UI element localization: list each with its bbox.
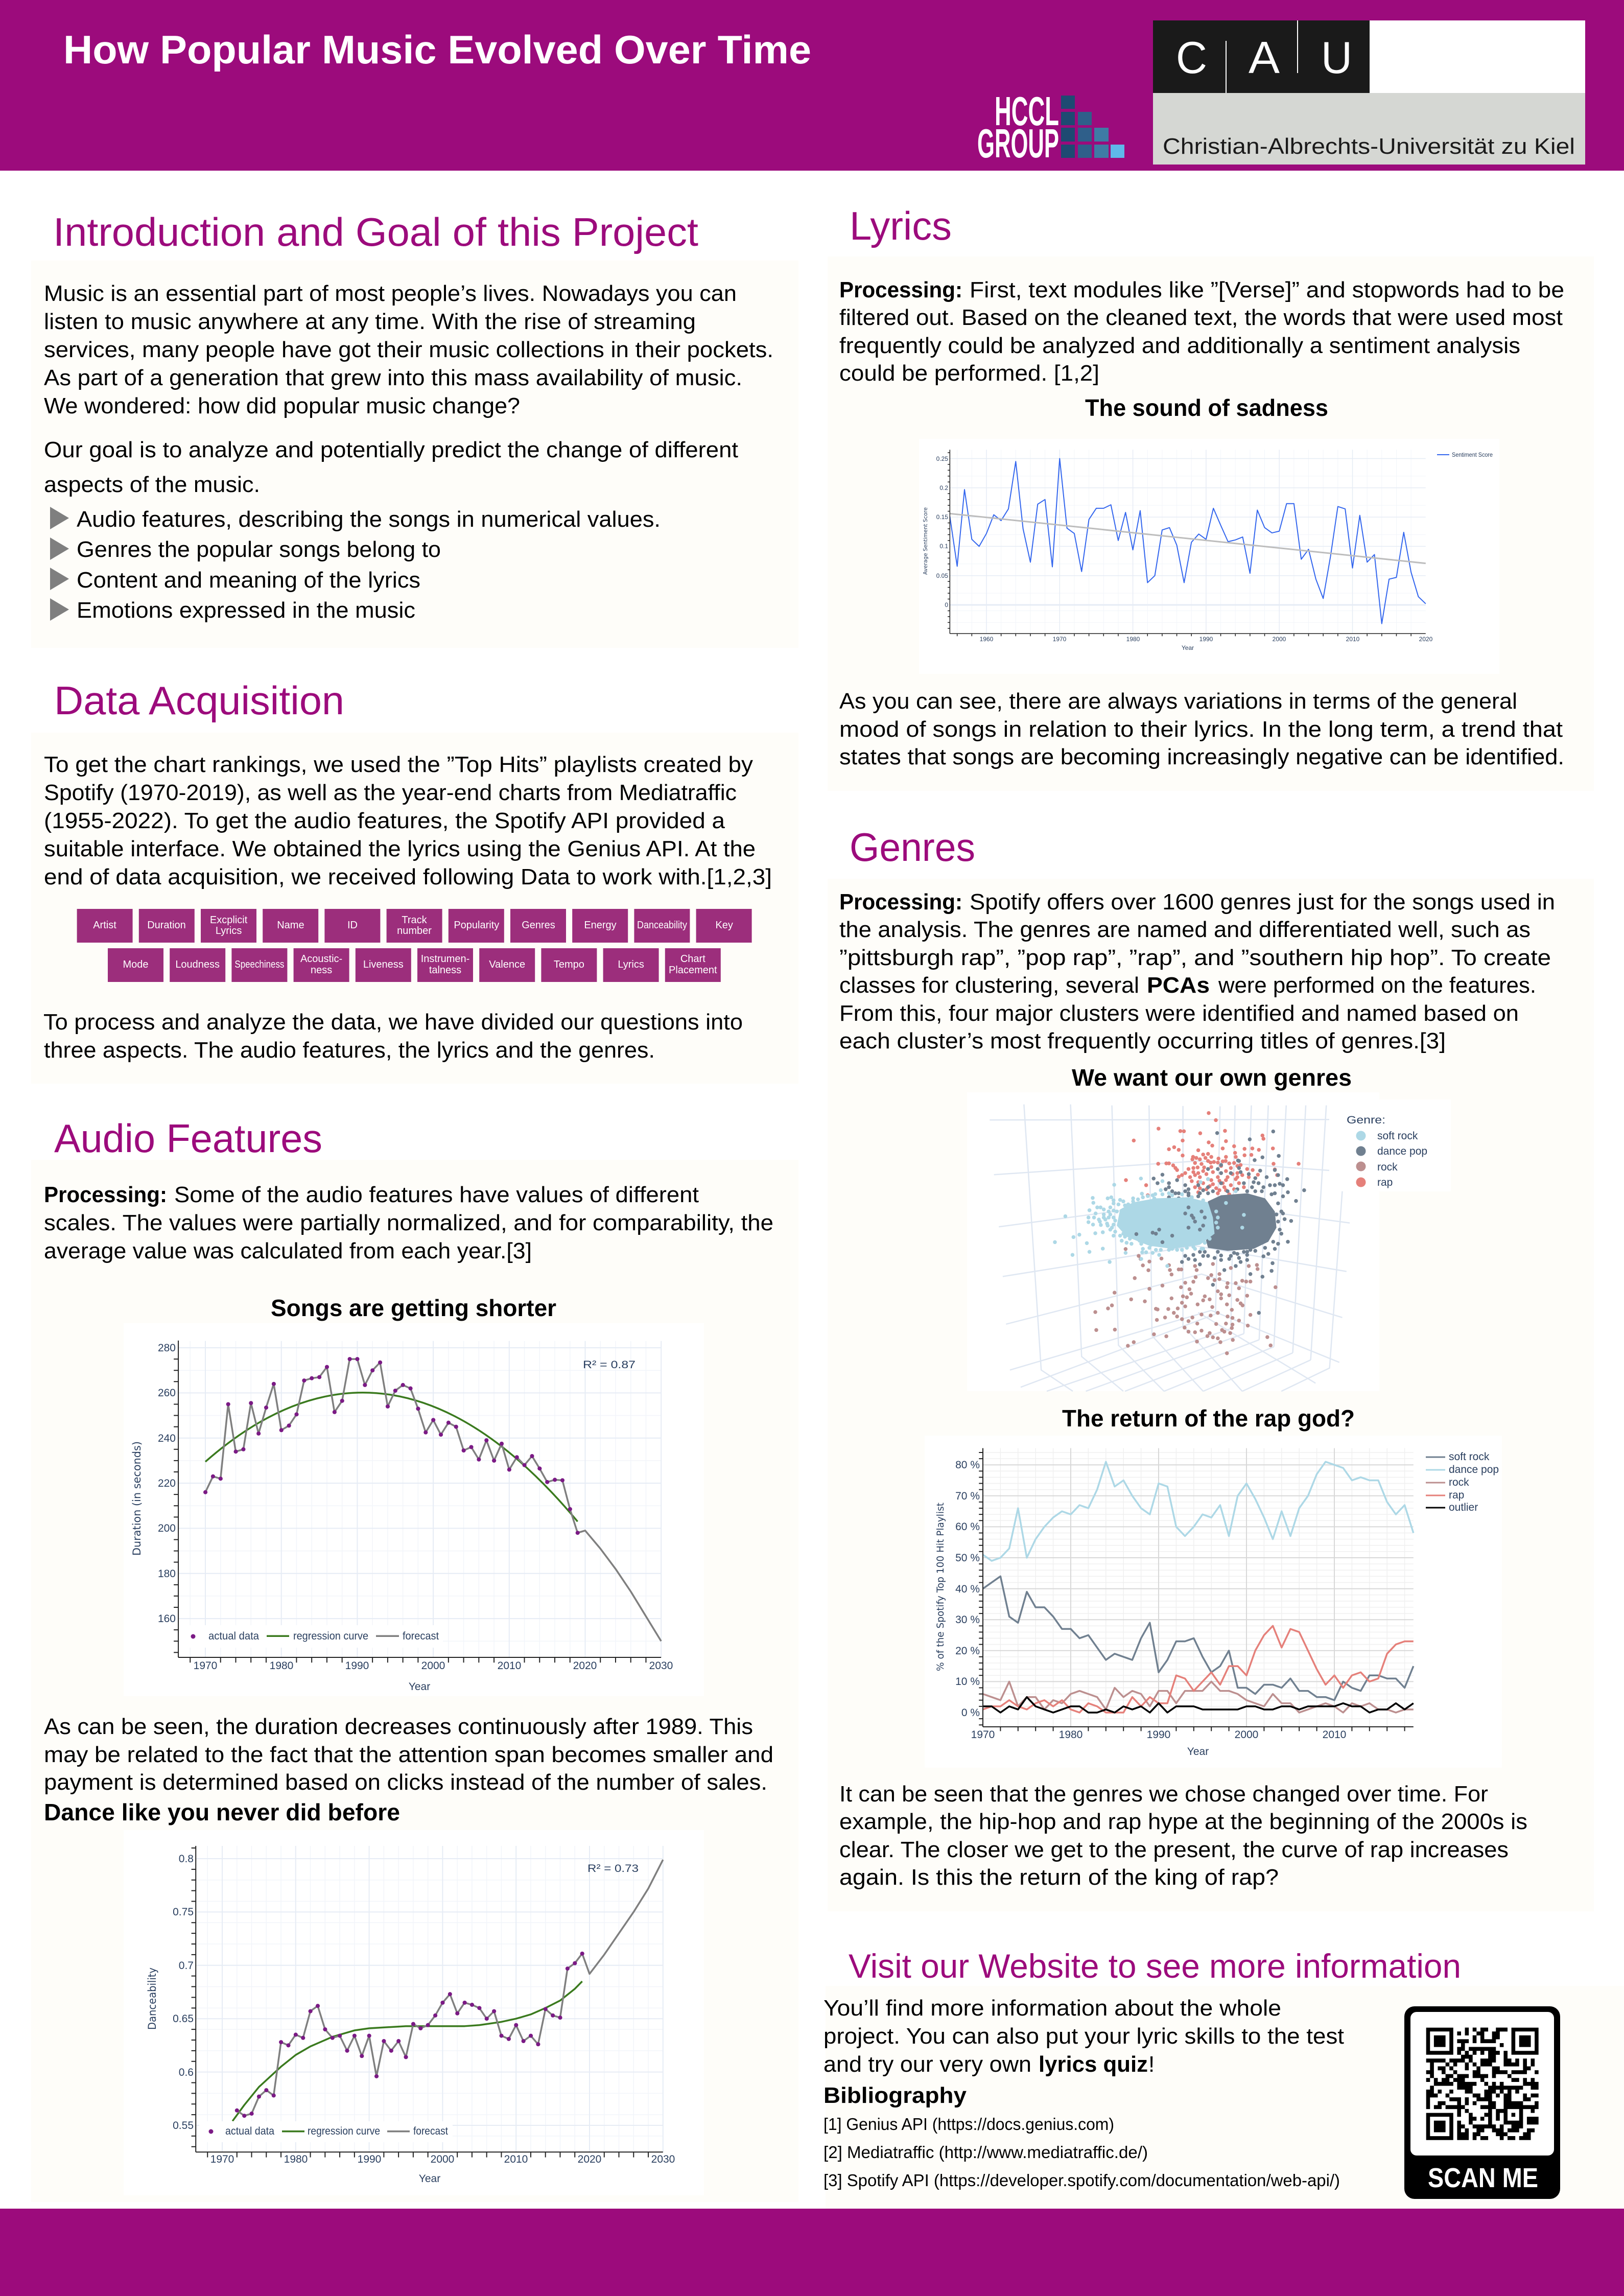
line chart: genre shares: % of the Spotify Top 100 Hit Playlist [935, 1503, 946, 1671]
line chart: danceability: R² = 0.73 [587, 1863, 639, 1875]
text block: website [823, 1996, 1344, 2077]
data attribute chips: Tempo [554, 959, 584, 970]
heading: introduction: Introduction and Goal of this Project [53, 209, 698, 254]
text block: duration explanation: As can be seen, the duration decreases continuously after 1989. This [44, 1714, 753, 1739]
data attribute chips: Danceability [637, 920, 687, 931]
line chart: duration: R² = 0.87 [583, 1359, 636, 1371]
panel: audio features [31, 1116, 798, 2202]
legend: genre lines: rock [1449, 1477, 1469, 1488]
data attribute chips: number [397, 925, 432, 936]
text block: lyrics processing: could be performed. [1,2] [839, 361, 1099, 386]
line chart: genre shares [925, 1436, 1502, 1768]
legend: genre: soft rock [1377, 1130, 1418, 1142]
data attribute chips: Popularity [454, 920, 499, 931]
line chart: sentiment: 0.15 [936, 513, 948, 521]
bullet list [50, 507, 661, 623]
panel: genres [828, 825, 1594, 1911]
bibliography: [1] Genius API (https://docs.genius.com) [823, 2115, 1114, 2134]
line chart: sentiment: Year [1182, 644, 1194, 651]
data attribute chips: Excplicit [210, 915, 248, 926]
legend: genre lines [1426, 1451, 1499, 1513]
line chart: sentiment: 0.05 [936, 572, 948, 579]
line chart: genre shares: 70 % [955, 1490, 980, 1502]
data attribute chips: Placement [669, 965, 717, 976]
heading: lyrics: Lyrics [850, 203, 952, 248]
QR code: SCAN ME [1428, 2163, 1538, 2193]
line chart: duration: forecast [403, 1630, 439, 1642]
data attribute chips: talness [429, 965, 461, 976]
line chart: duration: 1980 [270, 1660, 293, 1672]
heading: audio features: Audio Features [54, 1116, 322, 1161]
heading: genres: Genres [850, 825, 975, 870]
line chart: duration: 1990 [345, 1660, 369, 1672]
legend: genre lines: rap [1449, 1489, 1464, 1501]
legend: genre lines: outlier [1449, 1502, 1478, 1513]
CAU university logo: U [1321, 32, 1352, 83]
text block: lyrics explanation [839, 689, 1564, 769]
line chart: genre shares: 2000 [1235, 1729, 1258, 1741]
line chart: danceability: Year [419, 2173, 440, 2185]
line chart: danceability: 0.7 [179, 1960, 194, 1972]
text block: introduction: listen to music anywhere at any time. With the rise of streaming [44, 309, 696, 334]
CAU university logo: Christian-Albrechts-Universität zu Kiel [1163, 134, 1575, 159]
line chart: genre shares: 30 % [955, 1614, 980, 1626]
line chart: genre shares: 60 % [955, 1521, 980, 1533]
line chart: duration: 240 [158, 1433, 176, 1444]
heading: data acquisition: Data Acquisition [54, 678, 344, 723]
line chart: danceability: Danceability [146, 1967, 158, 2030]
line chart: danceability: 1990 [358, 2153, 381, 2165]
line chart: duration: Year [409, 1681, 430, 1693]
panel: lyrics [828, 203, 1594, 791]
text block: audio processing: scales. The values were partially normalized, and for comparability, the [44, 1210, 773, 1235]
text block: genres processing: PCAs [1147, 973, 1210, 998]
text block: data acquisition: (1955-2022). To get the audio features, the Spotify API provided a [44, 808, 725, 833]
line chart: sentiment: 2000 [1273, 636, 1286, 643]
text block: introduction: We wondered: how did popular music change? [44, 393, 520, 418]
line chart: genre shares: 10 % [955, 1676, 980, 1688]
data attribute chips: Track [402, 915, 428, 926]
data attribute chips: Lyrics [618, 959, 644, 970]
bibliography [823, 2083, 1340, 2190]
text block: data acquisition: end of data acquisition, we received following Data to work with.[1,2,3] [44, 864, 772, 889]
text block: lyrics processing: First, text modules like ”[Verse]” and stopwords had to be [970, 277, 1564, 302]
line chart: genre shares: 1980 [1059, 1729, 1082, 1741]
line chart: genre shares: 20 % [955, 1645, 980, 1657]
text block: lyrics explanation: mood of songs in relation to their lyrics. In the long term, a trend that [839, 717, 1563, 742]
legend: genre [1347, 1114, 1427, 1188]
line chart: duration: actual data [208, 1630, 259, 1642]
line chart: sentiment: 1970 [1053, 636, 1067, 643]
line chart: sentiment: 0.2 [939, 484, 948, 491]
text block: data acquisition: Spotify (1970-2019), as well as the year-end charts from Mediatraffic [44, 780, 737, 805]
chart title: dance: Dance like you never did before [44, 1799, 400, 1825]
line chart: genre shares: 2010 [1323, 1729, 1346, 1741]
text block: genres processing: ”pittsburgh rap”, ”pop rap”, ”rap”, and ”southern hip hop”. To create [839, 945, 1551, 970]
data attribute chips: ID [347, 920, 358, 931]
text block: audio processing: Some of the audio features have values of different [174, 1182, 699, 1207]
line chart: danceability: 0.55 [173, 2120, 194, 2131]
text block: introduction: Our goal is to analyze and potentially predict the change of different [44, 437, 738, 462]
text block: introduction [44, 281, 773, 497]
text block: data acquisition: suitable interface. We obtained the lyrics using the Genius API. At the [44, 836, 756, 861]
line chart: genre shares: 0 % [961, 1707, 980, 1719]
chart title: own genres: We want our own genres [1072, 1064, 1352, 1091]
text block: genres explanation: example, the hip-hop and rap hype at the beginning of the 2000s is [839, 1809, 1527, 1834]
data attribute chips: Duration [147, 920, 186, 931]
rock points [1095, 1249, 1276, 1353]
panel: introduction [31, 209, 798, 648]
data attribute chips: Genres [522, 920, 555, 931]
text block: lyrics processing [839, 277, 1564, 386]
line chart: genre shares: 40 % [955, 1583, 980, 1595]
line chart: sentiment: 1980 [1126, 636, 1140, 643]
line chart: sentiment: Average Sentiment Score [922, 507, 929, 575]
text block: genres processing [839, 889, 1555, 1053]
text block: audio processing [44, 1182, 773, 1263]
data attribute chips: Speechiness [234, 959, 284, 970]
text block: website: lyrics quiz [1039, 2052, 1148, 2077]
line chart: danceability: regression curve [308, 2125, 380, 2137]
line chart: duration: Duration (in seconds) [131, 1441, 143, 1556]
line chart: genre shares: Year [1187, 1746, 1209, 1758]
title: How Popular Music Evolved Over Time [63, 27, 811, 72]
chart title: sadness: The sound of sadness [1085, 394, 1328, 421]
bullet list: Audio features, describing the songs in numerical values. [77, 507, 661, 532]
data attribute chips: Chart [680, 953, 705, 965]
line chart: duration: 2010 [498, 1660, 521, 1672]
CAU university logo: A [1249, 32, 1280, 83]
line chart: genre shares: 80 % [955, 1459, 980, 1471]
chart title: songs: Songs are getting shorter [271, 1295, 556, 1321]
line chart: duration: 2020 [573, 1660, 597, 1672]
scatter chart: genre clusters [967, 1092, 1451, 1391]
line chart: sentiment: Sentiment Score [1452, 451, 1493, 458]
bibliography: [2] Mediatraffic (http://www.mediatraffic.de/) [823, 2143, 1148, 2162]
text block: genres processing: Spotify offers over 1600 genres just for the songs used in [970, 889, 1555, 915]
line chart: duration: 260 [158, 1387, 176, 1399]
CAU university logo: C [1176, 32, 1207, 83]
line chart: danceability: 1970 [210, 2153, 234, 2165]
text block: audio processing: average value was calculated from each year.[3] [44, 1238, 532, 1263]
line chart: danceability: 0.65 [173, 2013, 194, 2025]
line chart: duration: 280 [158, 1342, 176, 1354]
line chart: danceability: 1980 [284, 2153, 308, 2165]
dance pop points over soft rock [1136, 1207, 1205, 1242]
text block: genres processing: each cluster’s most frequently occurring titles of genres.[3] [839, 1028, 1446, 1053]
data attribute chips: Name [277, 920, 304, 931]
text block: genres processing: classes for clustering, several [839, 973, 1139, 998]
panel: data acquisition [31, 678, 798, 1084]
data attribute chips: Key [715, 920, 733, 931]
rap points [1126, 1113, 1299, 1199]
legend: genre: rock [1377, 1161, 1398, 1173]
line chart: sentiment: 1960 [980, 636, 994, 643]
bibliography: [3] Spotify API (https://developer.spotify.com/documentation/web-api/) [823, 2171, 1340, 2190]
text block: data acquisition: To get the chart rankings, we used the ”Top Hits” playlists created by [44, 752, 753, 777]
line chart: sentiment: 0.25 [936, 455, 948, 462]
line chart: genre shares: 1970 [971, 1729, 995, 1741]
text block: lyrics explanation: As you can see, there are always variations in terms of the general [839, 689, 1517, 714]
footer banner [0, 2209, 1624, 2296]
chart title: rap god: The return of the rap god? [1062, 1405, 1355, 1432]
HCCL group logo: GROUP [977, 121, 1059, 166]
line chart: sentiment: 0.1 [939, 543, 948, 550]
legend: genre lines: soft rock [1449, 1451, 1490, 1463]
QR code [1404, 2006, 1560, 2199]
header banner [0, 0, 1624, 171]
line chart: danceability: forecast [413, 2125, 448, 2137]
line chart: danceability: 2000 [431, 2153, 454, 2165]
text block: duration explanation: payment is determined based on clicks instead of the number of sales. [44, 1770, 767, 1795]
bullet list: Emotions expressed in the music [77, 598, 415, 623]
text block: duration explanation [44, 1714, 773, 1795]
data attribute chips: Mode [123, 959, 149, 970]
text block: genres explanation [839, 1782, 1527, 1890]
text block: lyrics explanation: states that songs are becoming increasingly negative can be identified. [839, 744, 1564, 769]
line chart: danceability: 2010 [504, 2153, 528, 2165]
data attribute chips: Artist [93, 920, 116, 931]
text block: website: project. You can also put your lyric skills to the test [823, 2024, 1344, 2049]
soft rock points [1055, 1179, 1244, 1266]
text block: data aspects [43, 1010, 743, 1063]
text block: website: ! [1148, 2052, 1155, 2077]
text block: genres explanation: again. Is this the return of the king of rap? [839, 1865, 1279, 1890]
panel: website [823, 1947, 1624, 2209]
legend: genre: dance pop [1377, 1145, 1427, 1157]
HCCL group logo: HCCL [995, 88, 1059, 134]
line chart: duration: 180 [158, 1568, 176, 1580]
line chart: duration: 220 [158, 1478, 176, 1489]
heading: website: Visit our Website to see more information [849, 1947, 1461, 1985]
bibliography: Bibliography [823, 2083, 967, 2108]
legend: genre: rap [1377, 1177, 1393, 1188]
bullet list: Content and meaning of the lyrics [77, 568, 420, 593]
text block: introduction: As part of a generation that grew into this mass availability of music. [44, 365, 742, 390]
line chart: danceability: 2020 [578, 2153, 601, 2165]
line chart: duration: 160 [158, 1613, 176, 1625]
line chart: duration [124, 1323, 704, 1696]
line chart: sentiment: 2010 [1346, 636, 1360, 643]
line chart: danceability: 0.8 [179, 1853, 194, 1865]
line chart: sentiment: 2020 [1419, 636, 1433, 643]
data attribute chips: Liveness [363, 959, 404, 970]
text block: website: You’ll find more information about the whole [823, 1996, 1281, 2021]
line chart: sentiment: 0 [945, 601, 948, 608]
text block: lyrics processing: filtered out. Based on the cleaned text, the words that were used most [839, 305, 1563, 330]
text block: website: and try our very own [823, 2052, 1031, 2077]
line chart: duration: 1970 [194, 1660, 217, 1672]
text block: lyrics processing: Processing: [839, 277, 962, 302]
line chart: danceability: 0.6 [179, 2067, 194, 2078]
data attribute chips [77, 909, 752, 982]
text block: introduction: Music is an essential part of most people’s lives. Nowadays you can [44, 281, 737, 306]
text block: data acquisition [44, 752, 772, 889]
legend: genre lines: dance pop [1449, 1464, 1499, 1475]
line chart: sentiment [919, 439, 1499, 674]
text block: lyrics processing: frequently could be analyzed and additionally a sentiment analysis [839, 333, 1520, 358]
text block: genres processing: Processing: [839, 889, 962, 915]
text block: data aspects: three aspects. The audio features, the lyrics and the genres. [44, 1038, 655, 1063]
line chart: danceability: 0.75 [173, 1906, 194, 1918]
text block: genres processing: From this, four major clusters were identified and named based on [839, 1001, 1519, 1026]
line chart: duration: regression curve [293, 1630, 368, 1642]
line chart: danceability: 2030 [651, 2153, 675, 2165]
legend: genre: Genre: [1347, 1114, 1385, 1126]
line chart: danceability [124, 1830, 704, 2195]
data attribute chips: Acoustic- [300, 953, 342, 965]
line chart: duration: 200 [158, 1522, 176, 1534]
data attribute chips: Energy [584, 920, 617, 931]
bullet list: Genres the popular songs belong to [77, 537, 441, 562]
data attribute chips: Valence [489, 959, 525, 970]
line chart: duration: 2030 [649, 1660, 673, 1672]
text block: introduction: services, many people have got their music collections in their pockets. [44, 337, 773, 362]
dance pop points [1154, 1132, 1304, 1313]
line chart: sentiment: 1990 [1199, 636, 1213, 643]
text block: introduction: aspects of the music. [44, 472, 260, 497]
HCCL group logo [977, 88, 1124, 166]
data attribute chips: Instrumen- [421, 953, 469, 965]
line chart: duration: 2000 [421, 1660, 445, 1672]
line chart: genre shares: 50 % [955, 1552, 980, 1564]
data attribute chips: ness [311, 965, 332, 976]
data attribute chips: Loudness [175, 959, 220, 970]
data attribute chips: Lyrics [216, 925, 242, 936]
text block: audio processing: Processing: [44, 1182, 167, 1207]
text block: genres explanation: It can be seen that the genres we chose changed over time. For [839, 1782, 1488, 1807]
line chart: genre shares: 1990 [1147, 1729, 1170, 1741]
text block: genres explanation: clear. The closer we get to the present, the curve of rap increases [839, 1837, 1509, 1862]
CAU university logo [1153, 20, 1585, 165]
line chart: danceability: actual data [225, 2125, 274, 2137]
text block: genres processing: were performed on the features. [1218, 973, 1536, 998]
text block: duration explanation: may be related to the fact that the attention span becomes smaller and [44, 1742, 773, 1767]
text block: data aspects: To process and analyze the data, we have divided our questions into [43, 1010, 743, 1035]
text block: genres processing: the analysis. The genres are named and differentiated well, such as [839, 917, 1531, 942]
